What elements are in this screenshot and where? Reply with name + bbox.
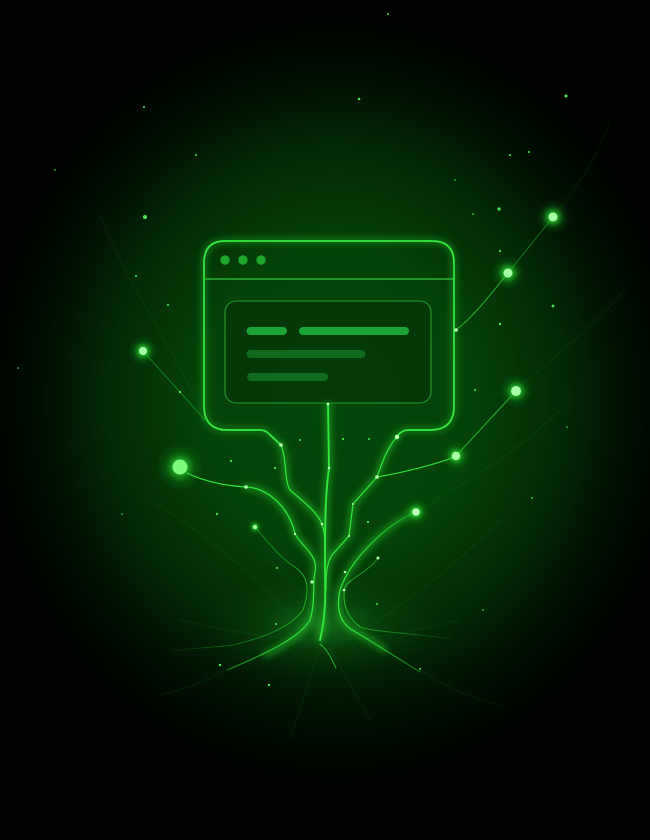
- upper part of large left branch: [187, 473, 295, 534]
- panel right links: [456, 273, 508, 330]
- faint background filaments: [100, 120, 625, 740]
- text placeholder bars: [246, 327, 409, 381]
- outer right upper link: [455, 391, 516, 457]
- root tail: [320, 644, 336, 668]
- panel outline: [204, 241, 454, 445]
- right branch: [326, 437, 397, 590]
- third right node: [499, 374, 533, 408]
- window control dots: [220, 255, 266, 265]
- right fork to node: [377, 457, 455, 477]
- scattered stars: [17, 13, 568, 686]
- top right node: [536, 200, 570, 234]
- branch from lower right node: [338, 512, 420, 672]
- glow under branches: [246, 403, 416, 655]
- branch from small left node: [173, 527, 307, 651]
- tree branches: [143, 217, 553, 672]
- trunk: [320, 403, 329, 640]
- short lower right branch: [344, 558, 453, 639]
- second right node: [491, 256, 525, 290]
- small left node: [247, 519, 263, 535]
- inner card: [225, 301, 431, 403]
- fourth right node: [441, 441, 471, 471]
- window panel: [204, 241, 454, 445]
- branch from large left node: [187, 473, 315, 670]
- header divider: [205, 278, 453, 280]
- branch from panel left: [281, 445, 325, 552]
- panel glow: [204, 241, 454, 445]
- branch group softened: [143, 217, 553, 672]
- large left node: [156, 443, 204, 491]
- glowing nodes: [128, 200, 570, 591]
- junction points: [244, 328, 458, 591]
- lower right node: [402, 498, 430, 526]
- upper left node: [128, 336, 158, 366]
- left link: [143, 351, 205, 420]
